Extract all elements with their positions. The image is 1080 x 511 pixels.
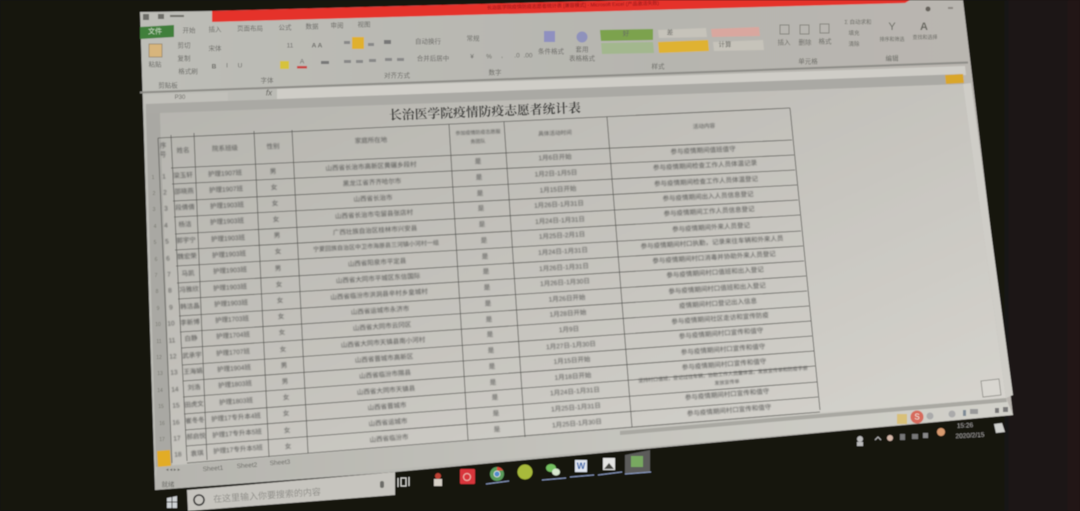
- row numbers: 17: [159, 437, 165, 443]
- row 10: 参与疫情期间村口值班和出入登记: [668, 280, 766, 296]
- row 15: 是: [489, 378, 497, 387]
- sheet tabs and status bar: Sheet3: [269, 459, 291, 467]
- row 4: 是: [478, 204, 485, 213]
- clipboard group: 格式刷: [178, 66, 198, 76]
- table header row: [160, 122, 716, 158]
- editing group: Σ 自动求和: [845, 18, 871, 26]
- row 6: [166, 220, 751, 263]
- row 8: [168, 249, 776, 295]
- row 8: 女: [275, 279, 283, 289]
- row header band: [146, 113, 172, 467]
- row 6: 1月25日-2月1日: [539, 230, 585, 241]
- row 8: 1月26日-1月31日: [539, 262, 589, 273]
- sheet tabs and status bar: 就绪: [162, 480, 175, 488]
- row 12: 武承宇: [182, 350, 203, 360]
- row 5: 5: [165, 238, 169, 246]
- editing group: [845, 6, 953, 62]
- number group: .00: [523, 52, 533, 60]
- cells group: 删除: [798, 38, 812, 46]
- row 11: 护理1704班: [216, 329, 251, 341]
- row numbers: 3: [153, 207, 156, 213]
- row numbers: 9: [157, 306, 160, 312]
- row 17: 参与疫情期间村口宣传和值守: [685, 386, 770, 402]
- row 5: 1月24日-1月31日: [535, 215, 585, 226]
- alignment group: [321, 36, 449, 80]
- row numbers: 8: [156, 289, 159, 295]
- font group: [208, 42, 323, 84]
- alignment group: 对齐方式: [384, 70, 410, 80]
- row 1: 护理1907班: [208, 168, 243, 178]
- row 2: 1月2日-1月5日: [535, 168, 577, 179]
- row 13: 参与疫情期间村口宣传和值守: [679, 326, 764, 340]
- row 9: 是: [484, 283, 491, 292]
- red title bar: 长治医学院疫情防疫志愿者统计表 [兼容模式] - Microsoft Excel (产品激活失败): [487, 0, 659, 11]
- row 3: 3: [164, 205, 168, 213]
- row 5: 广西壮族自治区桂林市兴安县: [333, 223, 418, 237]
- row 16: 16: [172, 419, 180, 427]
- row 7: 男: [275, 264, 281, 273]
- row 3: 参与疫情期间检查工作人员体温登记: [654, 174, 759, 188]
- row 13: 13: [170, 369, 178, 377]
- conditional format icons: 条件格式: [538, 46, 564, 56]
- row 10: 10: [167, 320, 175, 328]
- alignment group: 自动换行: [415, 36, 442, 46]
- row 17: 17: [173, 435, 181, 443]
- row numbers: 2: [153, 191, 156, 197]
- row 17: 护理17专升本5班: [212, 427, 263, 439]
- row 11: 1月28日开始: [549, 307, 587, 319]
- table header row: 姓名: [176, 145, 190, 155]
- row 9: 参与疫情期间村口值班和出入登记: [666, 265, 764, 279]
- row 15: [172, 356, 767, 410]
- row 1: 1月6日开始: [538, 152, 572, 162]
- clipboard group: [148, 40, 198, 90]
- ribbon bottom edge: [140, 62, 968, 94]
- table header row: 家庭所在地: [355, 135, 388, 145]
- row 2: [163, 158, 758, 197]
- row 12: 女: [279, 344, 287, 354]
- row 15: 女: [282, 392, 290, 402]
- table header row: 性别: [266, 141, 280, 151]
- row 16: 护理17专升本4班: [211, 411, 262, 423]
- row 13: 护理1904班: [217, 362, 252, 374]
- row 17: 郝启悦: [186, 431, 207, 441]
- row 17: 女: [283, 425, 291, 435]
- row 2: 黑龙江省齐齐哈尔市: [343, 176, 402, 188]
- row 16: 坚持村口值班，登记过往车辆，协助工作人员量体温，发放宣传单和防疫手册: [638, 365, 808, 384]
- row 18: 女: [284, 441, 292, 451]
- table title: 长治医学院疫情防疫志愿者统计表: [389, 100, 581, 123]
- row 5: [165, 204, 755, 246]
- editing group: 排序和筛选: [879, 36, 905, 43]
- row 10: 护理1703班: [215, 313, 250, 325]
- row 6: 是: [481, 236, 488, 245]
- font group: A: [300, 58, 305, 66]
- table header row: 院系班级: [212, 143, 239, 153]
- taskbar search box: [187, 472, 395, 511]
- row 10: 女: [277, 311, 285, 321]
- row 6: 宁夏回族自治区中卫市海原县三河镇小河村一组: [313, 238, 439, 254]
- row 1: 梁玉轩: [173, 170, 193, 180]
- row 6: 护理1903班: [212, 249, 247, 259]
- name box: [143, 92, 228, 104]
- row 1: 是: [475, 157, 482, 166]
- row 12: [169, 310, 769, 361]
- editing group: 填充: [848, 29, 860, 37]
- row 10: 李新博: [180, 317, 201, 327]
- row 13: 是: [487, 346, 495, 355]
- row 9: 女: [276, 295, 284, 305]
- row 17: [173, 386, 770, 443]
- number group: [466, 34, 533, 76]
- ribbon tabs: [182, 20, 370, 34]
- sheet tabs and status bar: [155, 398, 1013, 490]
- conditional format icons: [538, 31, 596, 62]
- conditional format icons: 表格格式: [569, 54, 596, 62]
- formula bar: [266, 66, 966, 99]
- font group: I: [226, 62, 228, 70]
- font group: 字体: [260, 76, 274, 84]
- row 5: 护理1903班: [211, 233, 246, 243]
- row 13: [170, 326, 764, 377]
- row 13: 王海娟: [183, 366, 203, 376]
- row 4: 参与疫情期间出入人员信息登记: [662, 189, 754, 203]
- table header row: 具体活动时间: [538, 128, 572, 138]
- clipboard group: 粘贴: [148, 60, 162, 68]
- editing group: 清除: [848, 40, 860, 48]
- row 18: 18: [174, 451, 182, 459]
- row 12: 参与疫情期间社区走访和宣传防疫: [671, 310, 769, 326]
- row 11: 山西省大同市云冈区: [353, 320, 412, 332]
- cell styles gallery: [600, 27, 764, 70]
- row 10: [167, 280, 766, 328]
- row 10: 是: [485, 299, 492, 308]
- row 6: 魏宏荣: [177, 251, 197, 261]
- row 13: 1月27日-1月30日: [546, 340, 596, 351]
- row 3: 是: [477, 189, 484, 198]
- table header row: 务团队: [470, 138, 486, 145]
- cell styles gallery: 样式: [652, 62, 665, 70]
- row 3: 段倩倩: [175, 202, 195, 212]
- name box: P30: [175, 95, 186, 101]
- cells group: 格式: [818, 36, 832, 46]
- row 18: 是: [493, 425, 501, 434]
- status bar app icons: S: [914, 412, 920, 422]
- row 9: 1月26日-1月30日: [540, 277, 590, 288]
- ribbon tabs: 数据: [306, 22, 319, 30]
- row 16: [172, 365, 808, 427]
- table header row: 活动内容: [693, 122, 716, 130]
- cell styles gallery: 计算: [718, 40, 732, 48]
- row 12: 12: [169, 353, 177, 361]
- row numbers: 5: [154, 240, 157, 246]
- row 2: 参与疫情期间检查工作人员体温记录: [653, 158, 758, 172]
- column header band: [146, 74, 964, 114]
- row numbers: 10: [155, 322, 161, 328]
- row 11: 疫情期间村口登记出入信息: [679, 296, 758, 310]
- row 11: 女: [278, 327, 286, 337]
- row 8: 参与疫情期间村口消毒并协助外来人员登记: [652, 249, 776, 265]
- row 5: 郭宇宁: [176, 235, 196, 245]
- row 7: [167, 233, 784, 279]
- row 14: [171, 341, 766, 394]
- row 13: 男: [280, 361, 288, 370]
- row 12: 护理1707班: [216, 346, 251, 358]
- row 15: 15: [172, 402, 180, 410]
- row 12: 是: [486, 330, 494, 339]
- row 3: 1月15日开始: [539, 184, 577, 194]
- row 4: [164, 189, 754, 230]
- row 16: 发放宣传单: [714, 378, 740, 387]
- row 11: 11: [168, 337, 176, 345]
- row 14: 山西省临汾市隰县: [359, 368, 412, 380]
- row 15: 1月18日开始: [554, 370, 592, 382]
- row 8: 是: [483, 267, 490, 276]
- cell styles gallery: 差: [667, 28, 674, 36]
- row 8: 山西省大同市平城区东信国际: [336, 271, 421, 285]
- row numbers: 11: [156, 339, 162, 345]
- row numbers: 7: [155, 273, 158, 279]
- row 14: 刘浩: [187, 382, 201, 392]
- row 5: 是: [479, 220, 486, 229]
- ribbon tabs: 页面布局: [237, 24, 263, 32]
- row 2: 是: [476, 173, 483, 182]
- row 17: 是: [492, 409, 500, 418]
- row 3: [164, 174, 759, 213]
- worksheet area: [160, 84, 1006, 465]
- row 16: 女: [282, 408, 290, 418]
- row 12: 山西省大同市天镇县南小河村: [341, 335, 426, 349]
- row 14: 参与疫情期间村口宣传和值守: [681, 341, 766, 357]
- row 7: 护理1903班: [213, 265, 248, 275]
- row 11: 白静: [184, 333, 198, 343]
- row 1: 山西省长治市高新区黄碾乡段村: [325, 159, 417, 173]
- row 6: 6: [166, 255, 170, 263]
- ribbon tabs: 插入: [208, 24, 222, 34]
- clipboard group: 复制: [178, 54, 191, 62]
- font group: 宋体: [208, 44, 222, 52]
- row 9: [169, 265, 764, 312]
- highlighted column marker: [945, 74, 964, 84]
- row 18: [174, 402, 772, 459]
- row 16: 崔冬冬: [185, 415, 206, 425]
- row numbers: 1: [152, 175, 155, 181]
- clipboard group: 剪切: [178, 40, 191, 50]
- cells group: 单元格: [798, 56, 818, 66]
- row 16: 1月24日-1月31日: [550, 386, 600, 397]
- row 2: 护理1907班: [209, 184, 244, 194]
- row 8: 冯雅欣: [179, 284, 199, 294]
- sheet tabs and status bar: Sheet1: [202, 465, 224, 473]
- row 17: 山西省运城市: [368, 416, 408, 428]
- table header row: 参加疫情防疫志愿服: [455, 128, 501, 137]
- row 7: 是: [482, 252, 489, 261]
- row numbers: 15: [158, 404, 164, 410]
- clock: 15:26: [957, 422, 974, 430]
- highlighted row marker: [157, 450, 171, 468]
- row 9: 护理1903班: [214, 297, 249, 309]
- taskbar icons: W: [577, 461, 586, 471]
- row 4: 杨洁: [178, 219, 192, 229]
- clipboard group: 剪贴板: [158, 80, 178, 90]
- table header row: 序: [160, 140, 167, 150]
- row 8: 8: [168, 287, 172, 295]
- row 14: 14: [171, 386, 179, 394]
- sheet tabs and status bar: Sheet2: [236, 462, 258, 470]
- font group: B: [212, 64, 217, 70]
- vertical scrollbar: [963, 83, 1013, 398]
- row 7: 1月24日-1月31日: [538, 246, 588, 257]
- formula bar: fx: [266, 88, 273, 98]
- row 14: 1月15日开始: [553, 354, 591, 366]
- row numbers: 4: [154, 224, 157, 230]
- row 5: 参与疫情期间工作人员信息登记: [663, 204, 755, 218]
- editing group: 查找和选择: [912, 34, 938, 41]
- row 15: 参与疫情期间村口宣传和值守: [682, 356, 767, 372]
- row 18: 1月25日-1月30日: [552, 418, 602, 429]
- application window frame: [140, 0, 1013, 490]
- row 16: 山西省晋城市: [367, 400, 407, 412]
- number group: .0: [514, 52, 520, 60]
- clock: 2020/2/15: [955, 432, 985, 440]
- row 18: 山西省临汾市: [369, 432, 409, 444]
- row 18: 袁琪: [190, 448, 204, 458]
- start button area: [155, 490, 189, 511]
- row 18: 参与疫情期间村口宣传和值守: [687, 402, 772, 418]
- row 14: 男: [281, 377, 289, 386]
- row 12: 1月9日: [559, 325, 579, 334]
- row 16: 是: [491, 393, 499, 402]
- status bar app icons: [897, 407, 1008, 424]
- ribbon tabs: 公式: [278, 22, 292, 32]
- sheet tabs and status bar: ◂ ◂ ▸ ▸: [166, 467, 181, 473]
- row numbers: 6: [155, 257, 158, 263]
- file tab: 文件: [148, 26, 162, 36]
- quick access toolbar: [143, 14, 184, 20]
- row numbers: 14: [157, 388, 163, 394]
- row 3: 山西省长治市: [353, 193, 393, 203]
- row numbers: 16: [159, 421, 165, 427]
- row 4: 女: [273, 214, 280, 224]
- conditional format icons: 套用: [576, 44, 588, 54]
- row 8: 护理1903班: [213, 281, 248, 293]
- number group: %: [486, 54, 492, 60]
- taskbar search box: 在这里输入你要搜索的内容: [213, 486, 321, 504]
- number group: ¥: [470, 54, 474, 60]
- row 3: 护理1903班: [210, 200, 245, 210]
- row numbers: [152, 175, 165, 443]
- selection box at lower right: [981, 379, 1001, 397]
- row 15: 山西省大同市天镇县: [356, 383, 416, 397]
- taskbar icons: [398, 450, 651, 487]
- row 2: 2: [163, 189, 167, 197]
- ribbon tabs: 开始: [182, 26, 196, 34]
- row 18: 护理17专升本5班: [213, 442, 264, 456]
- editing group: 编辑: [886, 54, 899, 62]
- editing group: Y: [888, 21, 896, 33]
- row 6: 女: [275, 246, 282, 256]
- row 9: 9: [169, 304, 173, 312]
- row 17: 1月25日-1月31日: [551, 402, 601, 413]
- cells group: [778, 24, 832, 66]
- row 3: 女: [272, 198, 279, 208]
- table header row: 号: [160, 150, 167, 158]
- number group: 数字: [488, 68, 502, 76]
- row 2: 邵晓燕: [174, 186, 194, 196]
- editing group: A: [920, 21, 928, 33]
- row 10: 山西省运城市永济市: [351, 304, 410, 316]
- spreadsheet grid: [158, 108, 820, 463]
- row 9: 韩洁晶: [180, 301, 200, 311]
- font group: A A: [312, 42, 323, 50]
- row 6: 参与疫情期间外来人员登记: [672, 220, 751, 234]
- row 11: 是: [485, 315, 493, 324]
- cells group: 插入: [778, 38, 791, 46]
- row 1: 男: [270, 167, 276, 176]
- row 4: 山西省长治市屯留县张店村: [335, 207, 414, 221]
- row 1: [162, 144, 736, 181]
- row 2: 女: [271, 182, 278, 192]
- row 15: 田虎文: [184, 399, 205, 409]
- row numbers: 12: [156, 355, 162, 361]
- row 13: 山西省晋城市高新区: [355, 351, 414, 365]
- row 7: 马凯: [181, 269, 195, 278]
- row 4: 4: [164, 222, 168, 230]
- row 4: 1月26日-1月31日: [534, 199, 584, 210]
- row 14: 护理1803班: [218, 378, 253, 390]
- row 9: 山西省临汾市洪洞县辛村乡皇城村: [330, 287, 428, 301]
- red title bar: [212, 0, 910, 22]
- row 1: 1: [162, 173, 166, 181]
- number group: ,: [501, 52, 503, 60]
- font group: U: [238, 62, 243, 70]
- alignment group: 合并后居中: [417, 54, 449, 62]
- ribbon tabs: 审阅: [330, 20, 344, 30]
- row 7: 参与疫情期间村口执勤，记录来往车辆和外来人员: [640, 233, 784, 251]
- clock: [955, 422, 985, 440]
- row 14: 是: [488, 362, 496, 371]
- row 10: 1月26日开始: [548, 292, 586, 304]
- row 7: 山西省阳泉市平定县: [348, 256, 407, 268]
- file tab: [140, 25, 174, 39]
- row numbers: 13: [157, 371, 163, 377]
- cell styles gallery: 好: [623, 28, 630, 38]
- row 15: 护理1803班: [219, 395, 254, 407]
- ribbon tabs: 视图: [358, 20, 370, 28]
- row 4: 护理1903班: [210, 216, 245, 226]
- system tray icons: [857, 423, 1005, 446]
- row 11: [168, 296, 758, 345]
- row 7: 7: [167, 271, 171, 279]
- font group: 11: [287, 42, 294, 50]
- row 1: 参与疫情期间值班值守: [670, 144, 736, 156]
- row 5: 男: [274, 231, 280, 240]
- number group: 常规: [466, 34, 480, 42]
